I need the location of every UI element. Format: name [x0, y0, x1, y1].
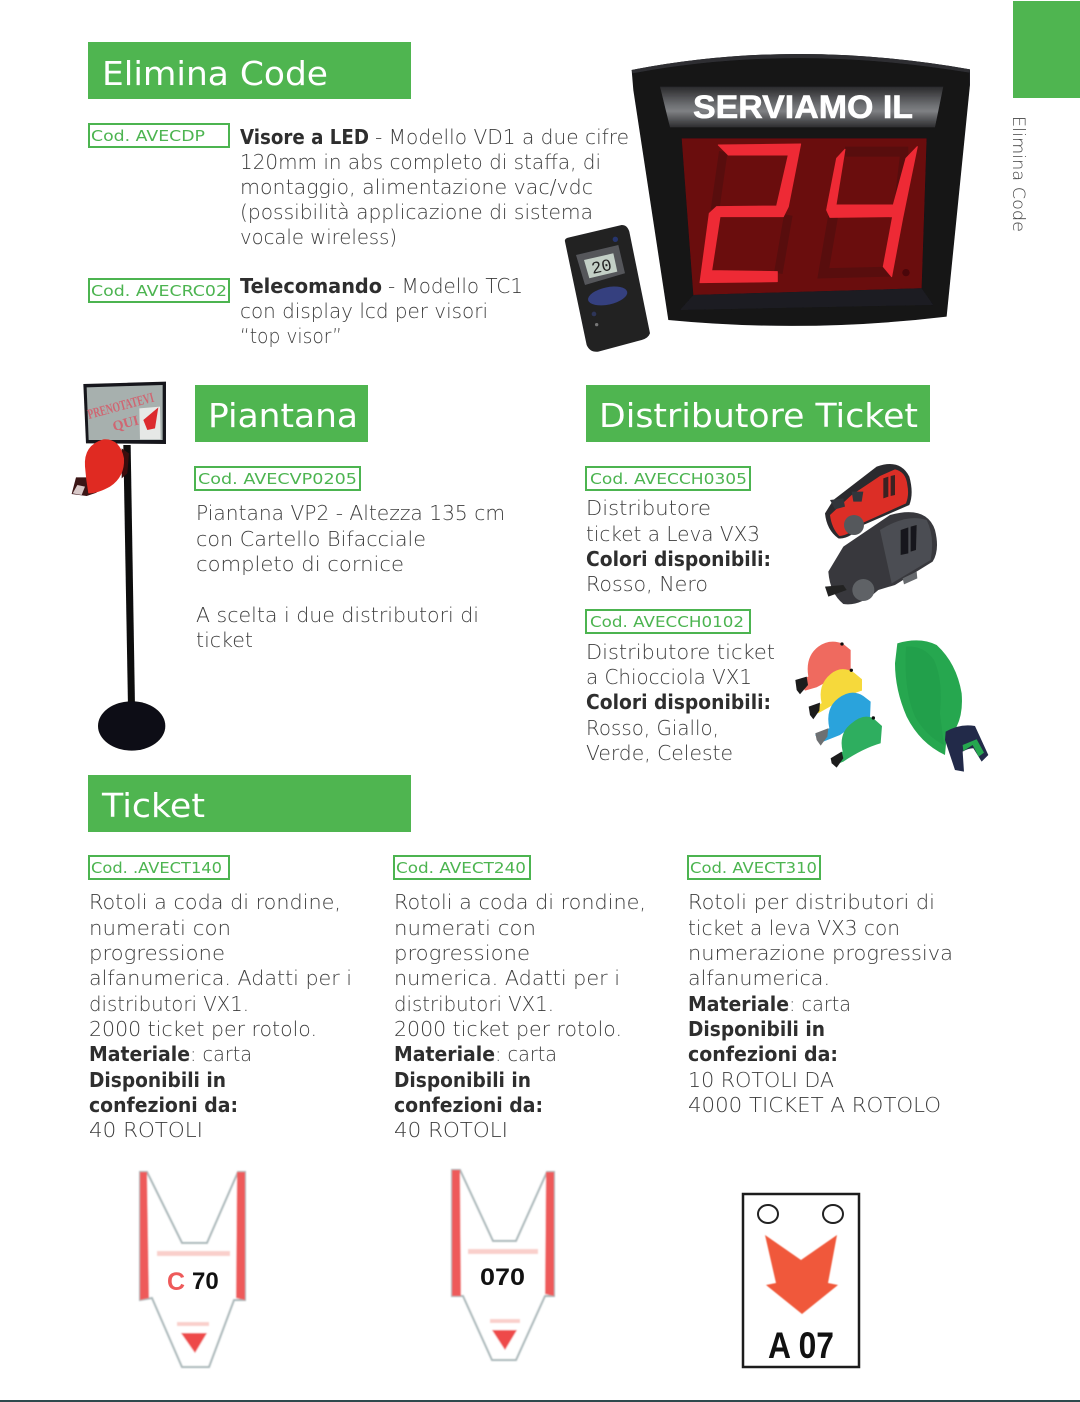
text: ticket column 3: confezioni da:: [688, 1042, 838, 1066]
text: ticket column 3: Disponibili in: [688, 1017, 825, 1041]
text: ticket column 2: : carta: [495, 1042, 557, 1066]
text: ticket column 3: ticket a leva VX3 con: [688, 916, 900, 940]
text: ticket column 1: confezioni da:: [89, 1093, 238, 1117]
code tag: AVECCH0305: Cod. AVECCH0305: [590, 470, 747, 488]
text: ticket column 1: Rotoli a coda di rondine,: [89, 890, 341, 914]
text: ticket column 3: Rotoli per distributori di: [688, 890, 935, 914]
heading: Elimina Code: [88, 42, 411, 99]
code tag: AVECCH0102: [586, 610, 750, 633]
text: ticket column 2: numerati con: [394, 916, 536, 940]
text: ticket column 1: Materiale: [89, 1042, 190, 1066]
text: Piantana description: con Cartello Bifacciale: [196, 527, 426, 551]
code tag: AVECT140: Cod. .AVECT140: [91, 859, 222, 877]
image: remote control: [565, 225, 650, 352]
text: ticket column 3: 4000 TICKET A ROTOLO: [688, 1093, 941, 1117]
heading: Piantana: Piantana: [208, 396, 358, 435]
text: Piantana description: A scelta i due distributori di: [196, 603, 479, 627]
text: ticket column 2: [394, 890, 646, 1142]
image: coloured dispensers: [795, 640, 988, 772]
image: ticket 070: [452, 1170, 554, 1360]
text: Visore a LED: (possibilità applicazione di sistema: [240, 200, 593, 224]
text: ticket column 1: [89, 890, 352, 1142]
code tag: AVECDP: Cod. AVECDP: [91, 127, 205, 145]
text: Visore a LED: [240, 125, 629, 249]
image: remote control: 20: [590, 257, 614, 280]
text: ticket column 3: 10 ROTOLI DA: [688, 1068, 834, 1092]
heading: Ticket: Ticket: [101, 786, 205, 825]
side tab: [1013, 1, 1080, 98]
code tag: AVECT310: Cod. AVECT310: [690, 859, 817, 877]
text: ticket column 1: 2000 ticket per rotolo.: [89, 1017, 317, 1041]
image: LED display: SERVIAMO IL: [693, 89, 913, 125]
heading: Ticket: [88, 775, 411, 832]
heading: Distributore Ticket: [586, 385, 930, 442]
code tag: AVECRC02: [89, 279, 229, 302]
text: ticket column 1: Disponibili in: [89, 1068, 226, 1092]
text: Telecomando: “top visor”: [240, 324, 342, 348]
text: Piantana description: ticket: [196, 628, 253, 652]
text: ticket column 2: 40 ROTOLI: [394, 1118, 508, 1142]
code tag: AVECT240: Cod. AVECT240: [396, 859, 526, 877]
image: stand with sign and dispenser: QUI: [111, 414, 141, 435]
text: Chiocciola VX1 description: Verde, Celeste: [586, 741, 733, 765]
text: Telecomando: con display lcd per visori: [240, 299, 488, 323]
text: ticket column 2: progressione: [394, 941, 530, 965]
text: Chiocciola VX1 description: Rosso, Giallo,: [586, 716, 719, 740]
image: lever dispensers: [825, 464, 937, 604]
text: ticket column 1: numerati con: [89, 916, 231, 940]
text: ticket column 2: Disponibili in: [394, 1068, 531, 1092]
text: Telecomando: Telecomando: [240, 274, 382, 298]
text: ticket column 2: numerica. Adatti per i: [394, 966, 620, 990]
text: Telecomando: - Modello TC1: [388, 274, 523, 298]
text: Piantana description: Piantana VP2 - Altezza 135 cm: [196, 501, 505, 525]
text: ticket column 1: distributori VX1.: [89, 992, 249, 1016]
text: Piantana description: [196, 501, 505, 652]
text: Visore a LED: montaggio, alimentazione vac/vdc: [240, 175, 593, 199]
image: ticket A 07: [743, 1194, 859, 1367]
text: ticket column 1: alfanumerica. Adatti per i: [89, 966, 352, 990]
code tag: AVECCH0305: [586, 467, 750, 490]
text: ticket column 3: [688, 890, 953, 1117]
text: Leva VX3 description: Distributore: [586, 496, 711, 520]
code tag: AVECVP0205: [195, 467, 360, 490]
text: ticket column 1: 40 ROTOLI: [89, 1118, 203, 1142]
text: ticket column 3: numerazione progressiva: [688, 941, 953, 965]
text: ticket column 2: Materiale: [394, 1042, 495, 1066]
code tag: AVECT240: [394, 856, 530, 879]
text: Leva VX3 description: [586, 496, 771, 596]
text: Chiocciola VX1 description: Colori disponibili:: [586, 690, 771, 714]
heading: Distributore Ticket: Distributore Ticket: [599, 396, 918, 435]
code tag: AVECVP0205: Cod. AVECVP0205: [198, 470, 357, 488]
text: Chiocciola VX1 description: a Chiocciola VX1: [586, 665, 752, 689]
text: Visore a LED: Visore a LED: [240, 125, 369, 149]
image: stand with sign and dispenser: [72, 382, 166, 751]
text: ticket column 1: progressione: [89, 941, 225, 965]
text: Leva VX3 description: Rosso, Nero: [586, 572, 708, 596]
code tag: AVECRC02: Cod. AVECRC02: [91, 282, 227, 300]
text: Leva VX3 description: ticket a Leva VX3: [586, 522, 760, 546]
text: Leva VX3 description: Colori disponibili:: [586, 547, 771, 571]
image: ticket C 70: 70: [192, 1268, 219, 1295]
heading: Piantana: [195, 385, 368, 442]
text: Visore a LED: 120mm in abs completo di staffa, di: [240, 150, 601, 174]
image: ticket C 70: [140, 1172, 245, 1367]
text: Chiocciola VX1 description: [586, 640, 775, 765]
image: ticket C 70: C: [167, 1268, 185, 1296]
image: ticket A 07: A 07: [768, 1325, 834, 1366]
heading: Elimina Code: Elimina Code: [102, 54, 328, 93]
text: Visore a LED: vocale wireless): [240, 225, 397, 249]
code tag: AVECT140: [89, 856, 229, 879]
side label: Elimina Code: [1008, 116, 1028, 232]
text: ticket column 3: Materiale: [688, 992, 789, 1016]
text: ticket column 2: Rotoli a coda di rondine,: [394, 890, 646, 914]
text: ticket column 3: : carta: [789, 992, 851, 1016]
text: Telecomando: [240, 274, 523, 348]
text: ticket column 2: confezioni da:: [394, 1093, 543, 1117]
image: LED display: [632, 54, 970, 326]
text: Visore a LED: - Modello VD1 a due cifre: [375, 125, 629, 149]
code tag: AVECCH0102: Cod. AVECCH0102: [590, 613, 744, 631]
text: ticket column 1: : carta: [190, 1042, 252, 1066]
image: ticket 070: 070: [480, 1264, 525, 1291]
text: ticket column 2: 2000 ticket per rotolo.: [394, 1017, 622, 1041]
image: stand with sign and dispenser: PRENOTATEVI: [86, 391, 156, 423]
text: Piantana description: completo di cornice: [196, 552, 404, 576]
text: Chiocciola VX1 description: Distributore ticket: [586, 640, 775, 664]
bottom edge line: [0, 1400, 1080, 1402]
code tag: AVECDP: [89, 124, 229, 147]
text: ticket column 3: alfanumerica.: [688, 966, 830, 990]
text: ticket column 2: distributori VX1.: [394, 992, 554, 1016]
